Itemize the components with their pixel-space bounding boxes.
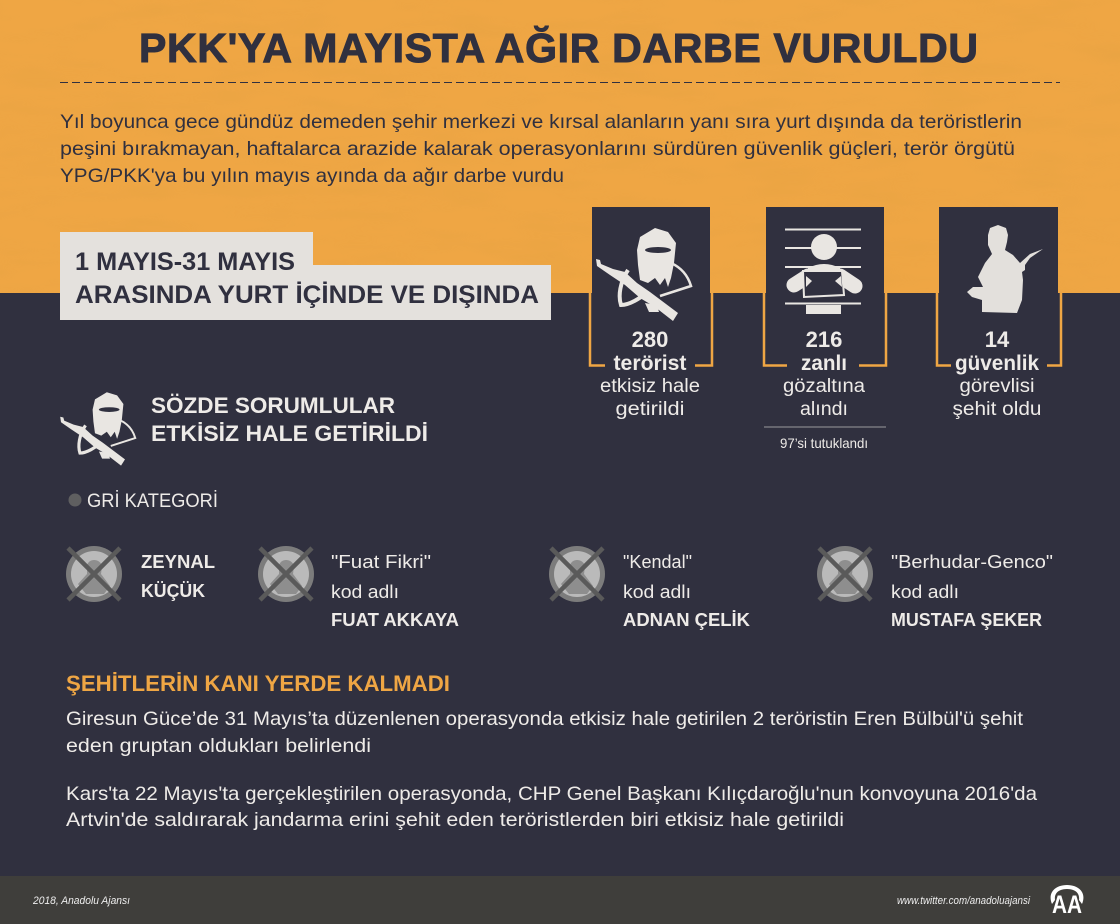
icon: Anadolu Agency logo: AA: [1052, 891, 1082, 919]
icon: crossed portrait: [817, 546, 873, 602]
stat: 14: 14: [985, 327, 1010, 352]
stat: 280: etkisiz hale: [600, 376, 700, 397]
person: Adnan Çelik: [549, 546, 751, 630]
stat: 216: zanlı: [801, 352, 847, 375]
person: Adnan Çelik: kod adlı: [623, 581, 691, 602]
icon: militant with rifle: [596, 228, 691, 321]
person: Zeynal Küçük: [66, 546, 215, 602]
person: Fuat Akkaya: FUAT AKKAYA: [331, 609, 459, 630]
stat: 14: görevlisi: [960, 376, 1034, 397]
intro text: peşini bırakmayan, haftalarca arazide kalarak operasyonlarını sürdüren güvenlik güçleri, terör örgütü: [60, 138, 1015, 160]
stat: 14: [952, 327, 1042, 420]
person: Mustafa Şeker: "Berhudar-Genco": [891, 551, 1053, 572]
stat: 216: [783, 327, 865, 420]
title: PKK'YA MAYISTA AĞIR DARBE VURULDU: [139, 25, 978, 71]
person: Fuat Akkaya: kod adlı: [331, 581, 399, 602]
section heading: leaders neutralised: SÖZDE SORUMLULAR: [151, 393, 395, 418]
person: Fuat Akkaya: "Fuat Fikri": [331, 551, 431, 572]
twitter url: www.twitter.com/anadoluajansi: [897, 895, 1030, 907]
person: Mustafa Şeker: kod adlı: [891, 581, 959, 602]
legend: grey category: GRİ KATEGORİ: [87, 491, 218, 512]
stat: 216: gözaltına: [783, 376, 865, 397]
stat panel: detainees: [764, 207, 886, 451]
section heading: leaders neutralised: ETKİSİZ HALE GETİRİLDİ: [151, 421, 428, 446]
note: arrested: 97’si tutuklandı: [780, 435, 868, 451]
stat: 280: 280: [632, 327, 668, 352]
stat: 280: getirildi: [616, 399, 684, 420]
footer: [0, 876, 1120, 924]
credit: 2018, Anadolu Ajansı: [32, 895, 130, 907]
stat panel: security forces: [937, 207, 1061, 420]
stat: 280: [600, 327, 700, 420]
icon: crossed portrait: [549, 546, 605, 602]
stat: 14: güvenlik: [955, 352, 1039, 375]
section heading: leaders neutralised: [60, 392, 428, 466]
date banner: ARASINDA YURT İÇİNDE VE DIŞINDA: [75, 281, 539, 309]
stat: 280: terörist: [614, 352, 686, 375]
body text: operations: Artvin'de saldırarak jandarma erini şehit eden teröristlerden biri etkisiz hale getirildi: [66, 809, 844, 831]
intro text: YPG/PKK'ya bu yılın mayıs ayında da ağır darbe vurdu: [60, 165, 564, 187]
person: Mustafa Şeker: [817, 546, 1053, 630]
person: Zeynal Küçük: ZEYNAL: [141, 551, 215, 572]
intro text: Yıl boyunca gece gündüz demeden şehir merkezi ve kırsal alanların yanı sıra yurt dışında da teröristlerin: [60, 111, 1022, 133]
person: Mustafa Şeker: MUSTAFA ŞEKER: [891, 609, 1042, 630]
orange top band: [0, 0, 1120, 293]
stat: 216: 216: [806, 327, 842, 352]
stat: 14: şehit oldu: [952, 399, 1042, 420]
icon: crossed portrait: [66, 546, 122, 602]
stat panel: terrorists: [590, 207, 712, 420]
person: Adnan Çelik: ADNAN ÇELİK: [623, 609, 751, 630]
date banner: [60, 232, 551, 320]
body text: operations: [66, 708, 1037, 831]
icon: crossed portrait: [258, 546, 314, 602]
body text: operations: Kars'ta 22 Mayıs'ta gerçekleştirilen operasyonda, CHP Genel Başkanı Kılıçdaroğlu'nun konvoyuna 2016'da: [66, 783, 1037, 805]
section heading: martyrs: ŞEHİTLERİN KANI YERDE KALMADI: [66, 671, 450, 696]
body text: operations: Giresun Güce’de 31 Mayıs’ta düzenlenen operasyonda etkisiz hale getirilen 2 teröristin Eren Bülbül'ü şehit: [66, 708, 1024, 730]
person: Zeynal Küçük: KÜÇÜK: [141, 580, 206, 601]
icon: soldier silhouette: [967, 225, 1043, 313]
icon: militant small: [60, 392, 135, 466]
intro text: [60, 111, 1022, 187]
date banner: 1 MAYIS-31 MAYIS: [75, 248, 295, 276]
stat: 216: alındı: [800, 399, 848, 420]
person: Fuat Akkaya: [258, 546, 459, 630]
icon: detainee with placard: [785, 230, 861, 314]
person: Adnan Çelik: "Kendal": [623, 551, 692, 572]
body text: operations: eden gruptan oldukları belirlendi: [66, 735, 371, 757]
